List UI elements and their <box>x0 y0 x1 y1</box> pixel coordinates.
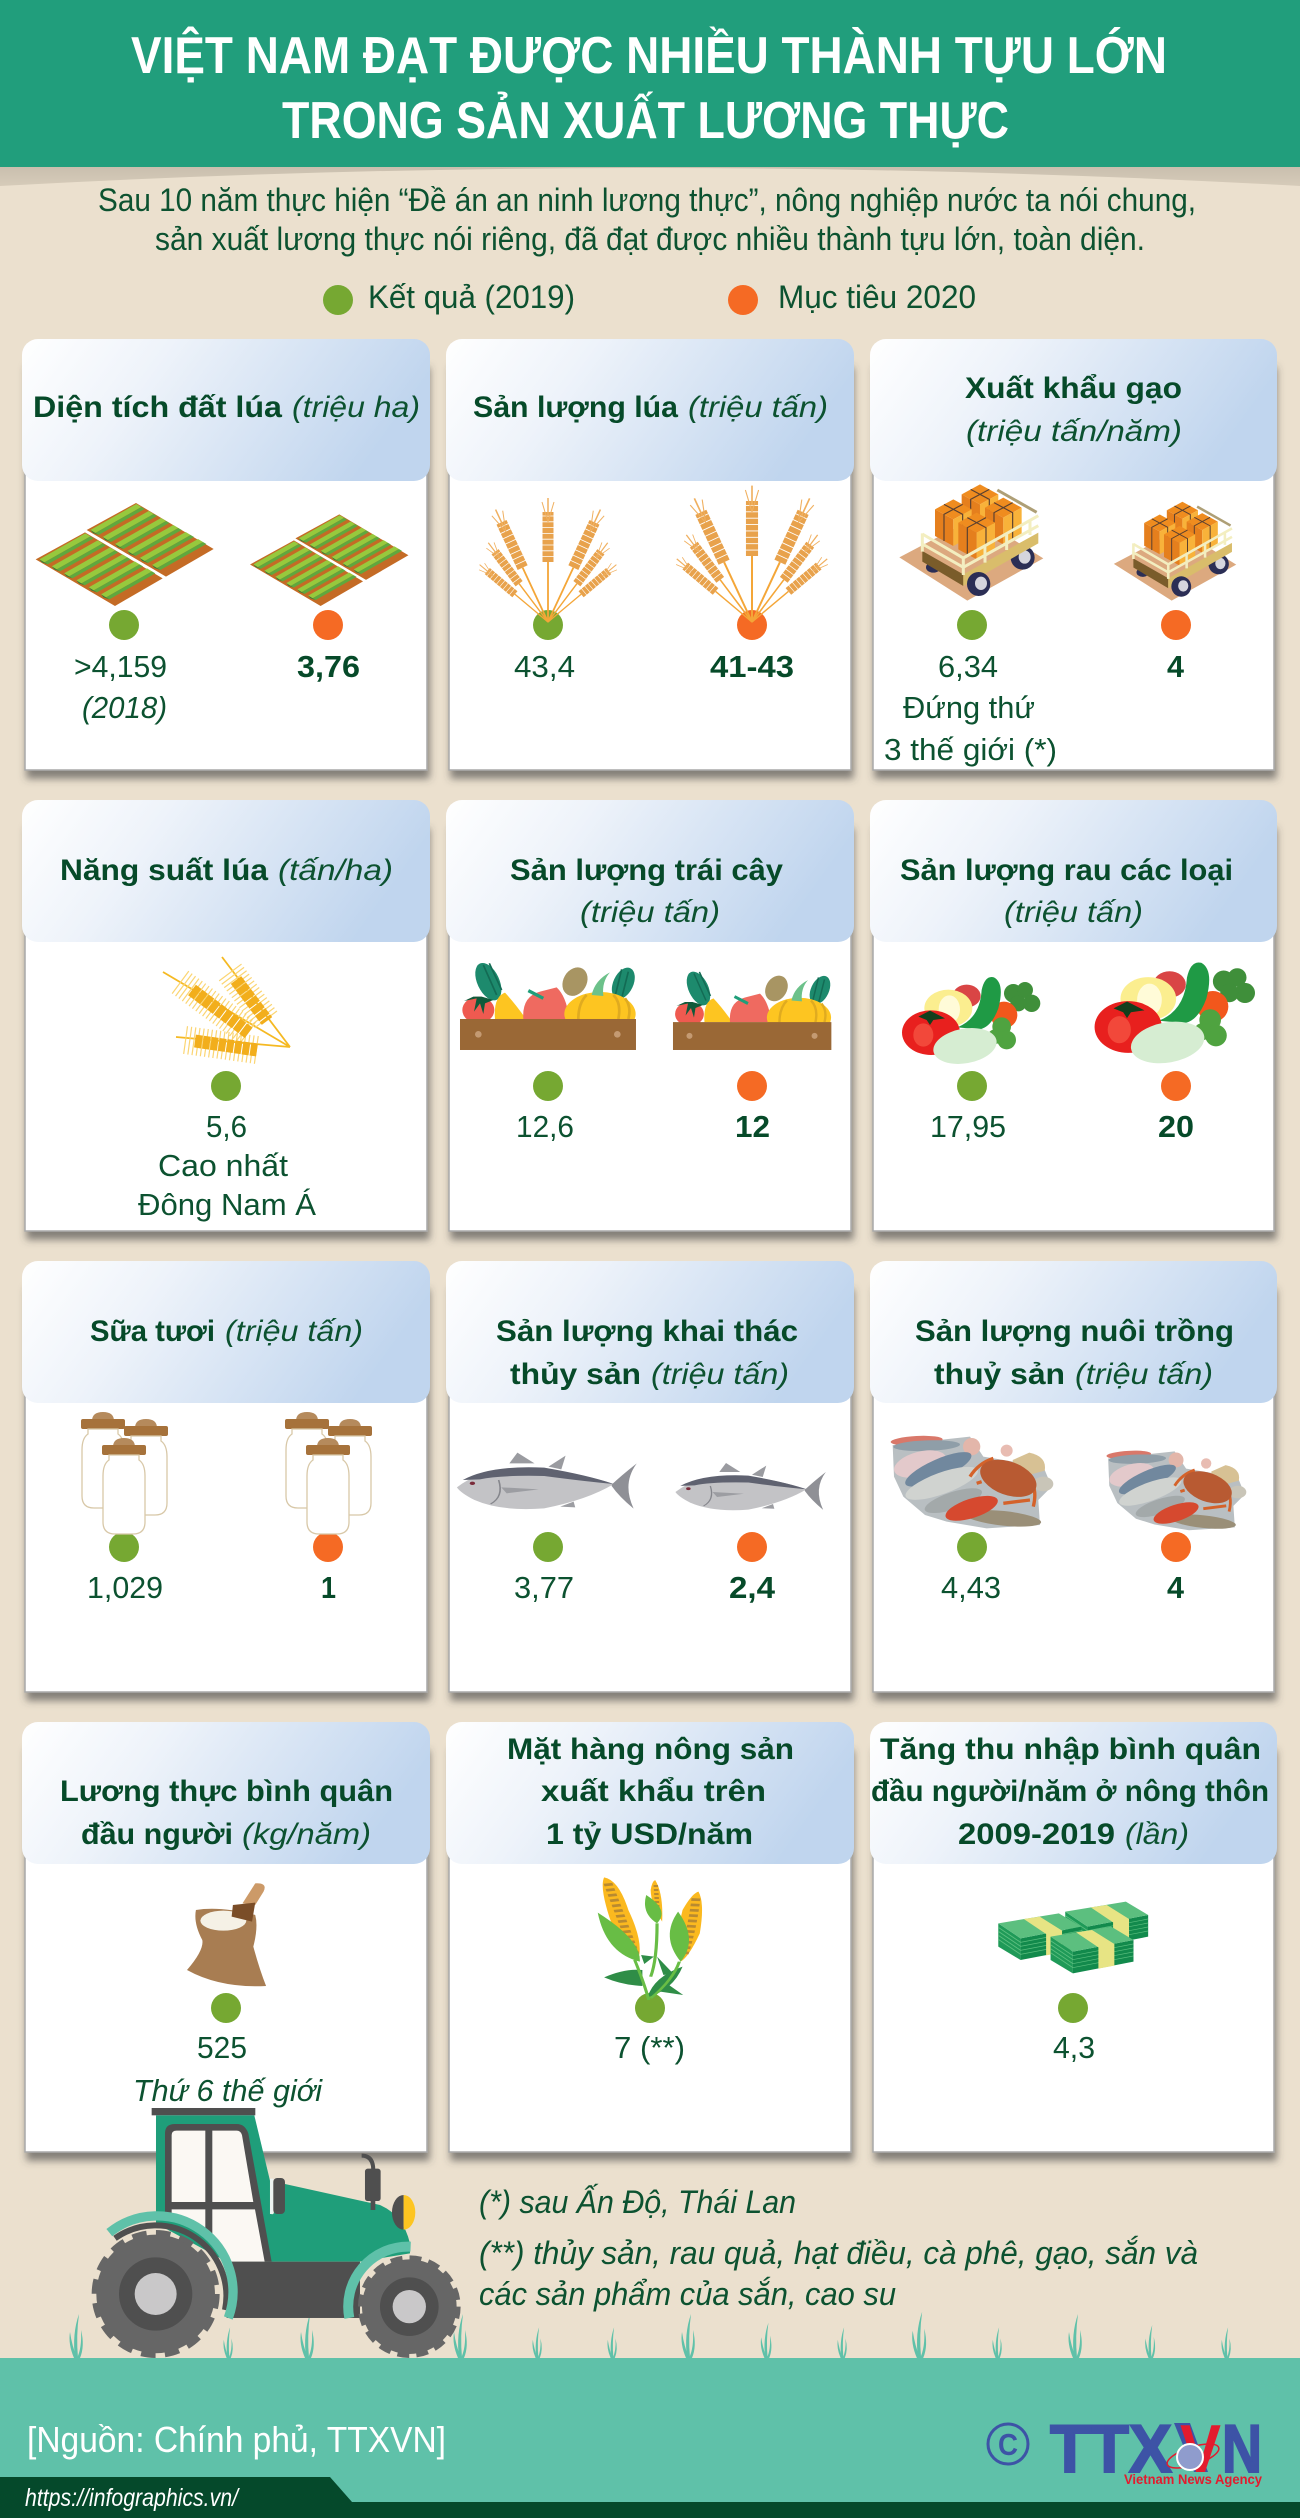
intro text: Sau 10 năm thực hiện “Đề án an ninh lương thực”, nông nghiệp nước ta nói chung, <box>98 182 1196 218</box>
legend: Kết quả (2019) <box>368 279 575 315</box>
heading: Sản lượng trái cây <box>510 854 783 887</box>
values: 41-43 <box>710 649 794 684</box>
logo: TTXVN: TTX <box>1050 2411 1172 2487</box>
heading <box>60 854 393 887</box>
panel: food per capita <box>22 1722 430 2152</box>
values <box>133 2030 323 2108</box>
heading <box>965 372 1182 448</box>
icon: crate large <box>460 959 639 1050</box>
icon: wheat large <box>674 486 830 626</box>
title banner <box>0 0 1300 167</box>
heading <box>507 1733 794 1851</box>
icon: cart large <box>899 484 1043 601</box>
value: 7 (**) <box>614 2030 685 2065</box>
logo: TTXVN: Vietnam News Agency <box>1124 2471 1262 2487</box>
website: https://infographics.vn/ <box>25 2484 241 2512</box>
panel: rice output <box>446 339 854 770</box>
heading: (triệu tấn) <box>651 1358 789 1391</box>
heading: đầu người/năm ở nông thôn <box>871 1775 1269 1808</box>
panel: export items <box>446 1722 854 2152</box>
heading <box>915 1315 1234 1391</box>
values: >4,159 <box>74 649 167 684</box>
values: Đông Nam Á <box>138 1187 316 1222</box>
logo: TTXVN: C <box>998 2427 1018 2462</box>
icon: seafood small <box>1106 1450 1246 1531</box>
heading: (triệu tấn) <box>1075 1358 1213 1391</box>
heading: Sản lượng khai thác <box>496 1315 798 1348</box>
heading: (triệu tấn) <box>688 391 828 424</box>
values: Đứng thứ <box>903 690 1035 725</box>
values: 5,6 <box>206 1109 247 1144</box>
values: 1 <box>321 1570 336 1605</box>
values <box>138 1109 316 1222</box>
source: [Nguồn: Chính phủ, TTXVN] <box>27 2419 446 2460</box>
logo: TTXVN <box>988 2411 1262 2487</box>
panel: vegetable output <box>870 800 1277 1231</box>
values: 525 <box>197 2030 247 2065</box>
values: 2,4 <box>729 1570 776 1605</box>
title banner: VIỆT NAM ĐẠT ĐƯỢC NHIỀU THÀNH TỰU LỚN <box>131 26 1167 85</box>
heading: (triệu ha) <box>292 391 420 424</box>
heading: (triệu tấn/năm) <box>966 415 1182 448</box>
values: 43,4 <box>514 649 575 684</box>
heading: (lần) <box>1125 1818 1189 1851</box>
heading: Sản lượng rau các loại <box>900 854 1233 887</box>
footnotes: (*) sau Ấn Độ, Thái Lan <box>479 2184 796 2220</box>
panel: aquaculture <box>870 1261 1277 1692</box>
heading: (triệu tấn) <box>225 1315 363 1348</box>
heading: (kg/năm) <box>242 1818 371 1851</box>
values: 3,76 <box>297 649 360 684</box>
values <box>941 1570 1185 1605</box>
heading <box>473 391 828 424</box>
panel: fresh milk <box>22 1261 430 1692</box>
panel: fruit output <box>446 800 854 1231</box>
grass tufts <box>70 2312 1231 2358</box>
heading: Sản lượng nuôi trồng <box>915 1315 1234 1348</box>
heading <box>510 854 783 929</box>
values: 12,6 <box>516 1109 574 1144</box>
intro text <box>98 182 1196 257</box>
legend: Mục tiêu 2020 <box>778 279 976 315</box>
logo: TTXVN: N <box>1222 2411 1262 2487</box>
values: 4,43 <box>941 1570 1001 1605</box>
values: 4 <box>1167 1570 1185 1605</box>
heading: Sản lượng lúa <box>473 391 678 424</box>
heading <box>33 391 420 424</box>
heading <box>900 854 1233 929</box>
heading <box>496 1315 798 1391</box>
values: 3 thế giới (*) <box>884 732 1057 767</box>
panel: rice yield <box>22 800 430 1231</box>
icon: vegetables large <box>1095 962 1255 1069</box>
value: 4,3 <box>1053 2030 1095 2065</box>
footnotes: (**) thủy sản, rau quả, hạt điều, cà phê, gạo, sắn và <box>479 2235 1198 2271</box>
heading: xuất khẩu trên <box>541 1775 766 1808</box>
intro text: sản xuất lương thực nói riêng, đã đạt được nhiều thành tựu lớn, toàn diện. <box>155 221 1145 257</box>
values: 20 <box>1158 1109 1194 1144</box>
icon: milk bottles 2019 <box>81 1412 168 1534</box>
values <box>514 1570 776 1605</box>
legend <box>323 279 976 315</box>
icon: money stacks <box>998 1902 1148 1973</box>
heading: 2009-2019 <box>958 1818 1115 1851</box>
icon: rice sack <box>187 1883 266 1986</box>
values <box>514 649 794 684</box>
icon: wheat small <box>477 498 619 625</box>
icon: milk bottles target <box>285 1412 372 1534</box>
title banner: TRONG SẢN XUẤT LƯƠNG THỰC <box>282 91 1009 150</box>
heading: 1 tỷ USD/năm <box>546 1818 753 1851</box>
values: 12 <box>735 1109 770 1144</box>
values: (2018) <box>82 690 167 725</box>
values <box>87 1570 336 1605</box>
heading: Sữa tươi <box>90 1315 215 1348</box>
heading: (triệu tấn) <box>1004 896 1143 929</box>
values: 1,029 <box>87 1570 163 1605</box>
values <box>516 1109 770 1144</box>
values: 4 <box>1167 649 1185 684</box>
icon: golden wheat <box>163 957 290 1050</box>
panel: rice exports <box>870 339 1277 770</box>
heading: thuỷ sản <box>934 1358 1065 1391</box>
heading <box>871 1733 1269 1851</box>
values: 6,34 <box>938 649 998 684</box>
values: Thứ 6 thế giới <box>133 2073 323 2108</box>
footer band <box>0 2358 1300 2518</box>
icon: tractor <box>94 2108 458 2356</box>
logo: TTXVN: V <box>1180 2411 1221 2487</box>
heading: đầu người <box>81 1818 233 1851</box>
heading: (triệu tấn) <box>580 896 720 929</box>
icon: seafood large <box>890 1435 1053 1530</box>
heading: Diện tích đất lúa <box>33 391 282 424</box>
heading: thủy sản <box>510 1358 641 1391</box>
heading: Lương thực bình quân <box>60 1775 393 1808</box>
icon: tuna large <box>457 1453 637 1509</box>
heading: Năng suất lúa <box>60 854 268 887</box>
icon: tuna small <box>675 1463 826 1510</box>
icon: crate small <box>673 968 834 1050</box>
values: 3,77 <box>514 1570 574 1605</box>
icon: corn plant <box>598 1877 702 2000</box>
heading <box>60 1775 393 1851</box>
heading: Tăng thu nhập bình quân <box>880 1733 1261 1766</box>
heading: Xuất khẩu gạo <box>965 372 1182 405</box>
heading <box>90 1315 363 1348</box>
icon: cart small <box>1114 502 1236 601</box>
panel: rice land area <box>22 339 430 770</box>
values <box>74 649 360 725</box>
values <box>884 649 1185 767</box>
panel: capture fisheries <box>446 1261 854 1692</box>
icon: vegetables small <box>902 977 1040 1069</box>
values: 17,95 <box>930 1109 1006 1144</box>
header arc shadow <box>0 167 1300 186</box>
footnotes: các sản phẩm của sắn, cao su <box>479 2276 896 2312</box>
heading: Mặt hàng nông sản <box>507 1733 794 1766</box>
panel: rural income <box>870 1722 1277 2152</box>
heading: (tấn/ha) <box>278 854 393 887</box>
values: Cao nhất <box>158 1148 288 1183</box>
footnotes <box>479 2184 1198 2312</box>
values <box>930 1109 1194 1144</box>
icon: rice field small <box>250 514 408 606</box>
icon: rice field large <box>36 503 214 606</box>
